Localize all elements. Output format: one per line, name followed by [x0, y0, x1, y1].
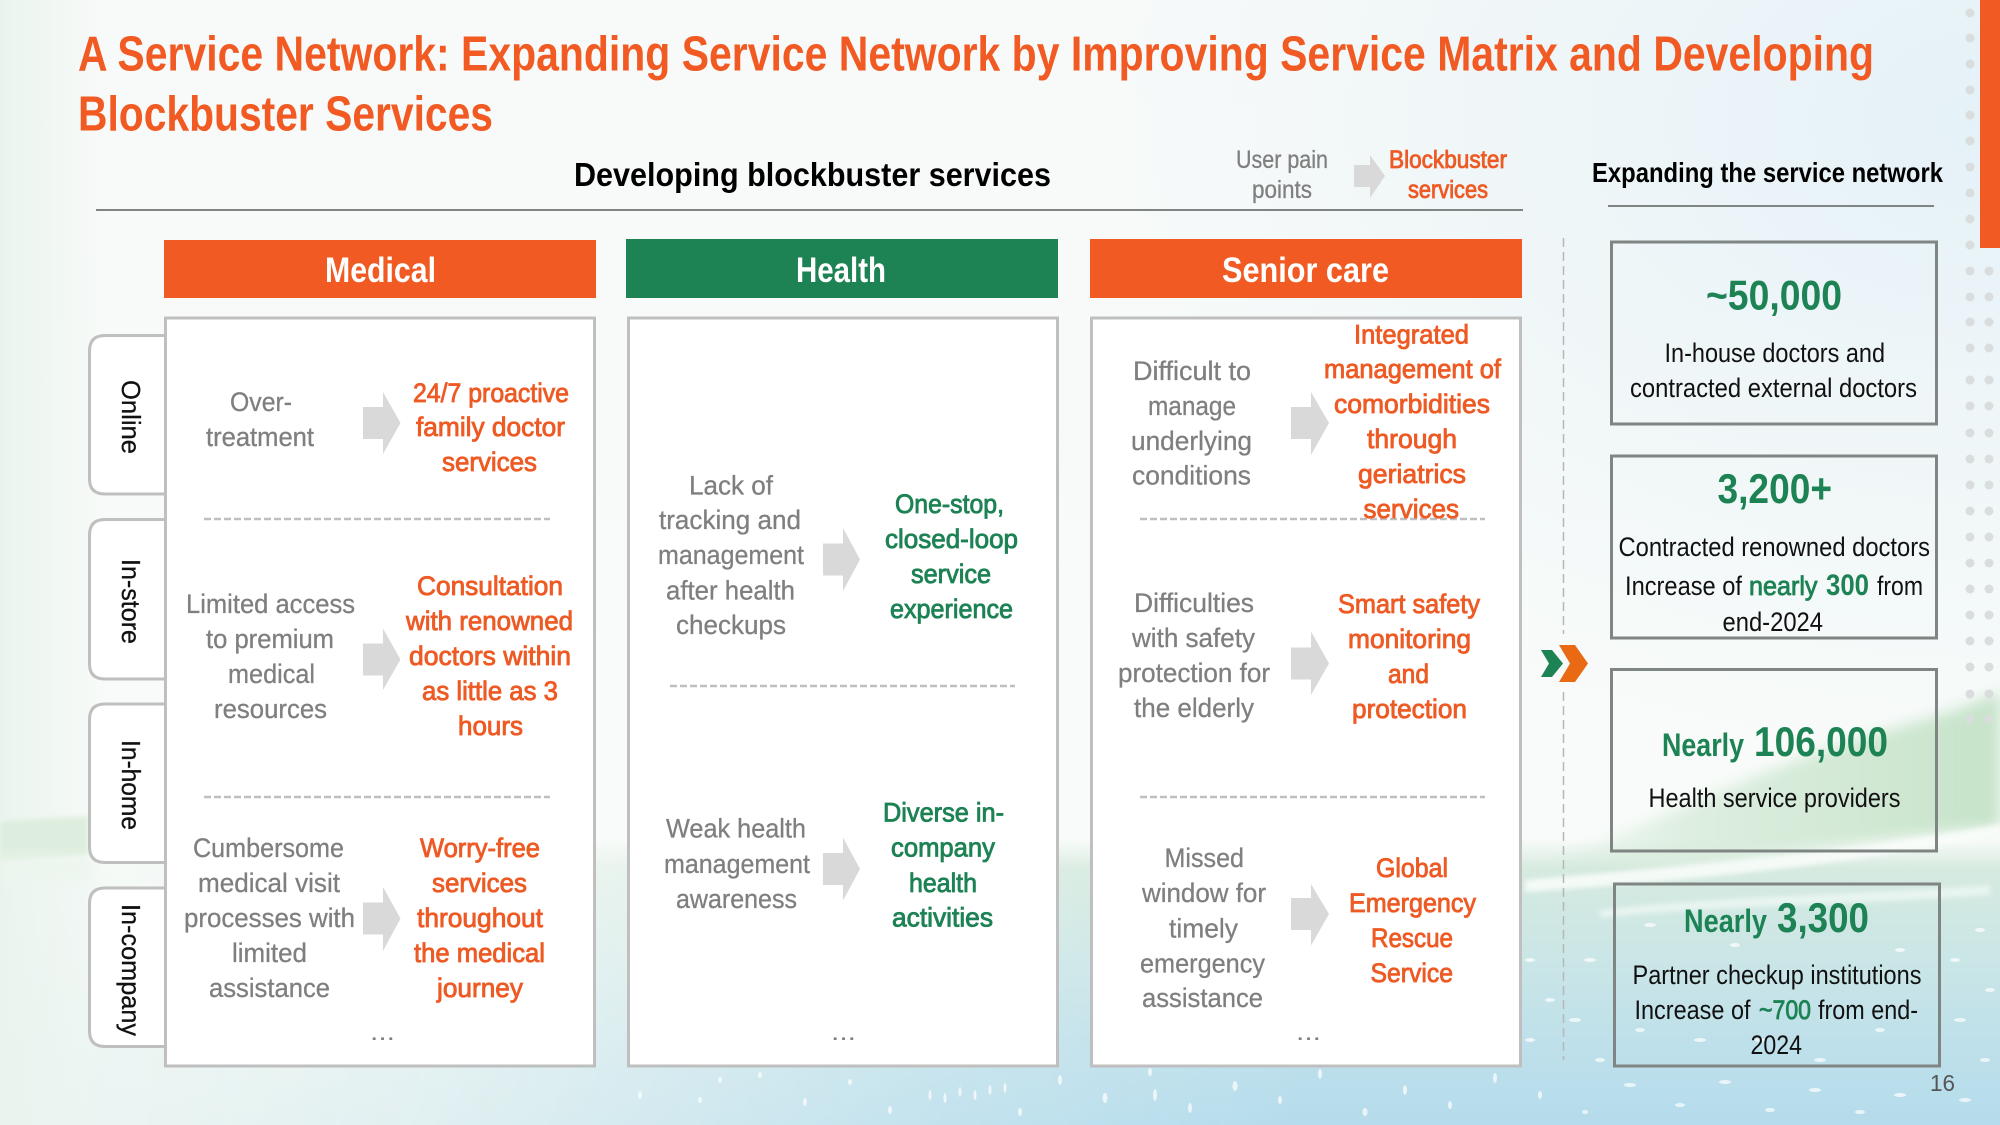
stat box: renowned doctors — [1612, 456, 1936, 638]
senior row 3: emergency assistance: assistance — [1142, 983, 1263, 1013]
channel tab: online — [90, 336, 165, 494]
panel: senior care — [1092, 318, 1520, 1066]
medical row 1: over-treatment: treatment — [206, 422, 314, 452]
legend: user pain points to blockbuster services: Blockbuster — [1389, 146, 1507, 174]
stat box: partner checkup institutions: Increase of — [1634, 995, 1751, 1025]
medical row 1: over-treatment: services — [442, 447, 537, 477]
legend: user pain points to blockbuster services: points — [1252, 176, 1312, 204]
senior row 2: safety protection — [1118, 588, 1480, 724]
medical row 3: cumbersome visits: journey — [436, 973, 523, 1003]
stat box: partner checkup institutions: from end- — [1818, 995, 1918, 1025]
health row 1: lack of tracking — [658, 470, 1018, 640]
senior row 1: underlying conditions: Integrated — [1354, 320, 1469, 350]
health row 2: weak awareness: health — [909, 868, 977, 898]
medical row 3: cumbersome visits: limited — [232, 938, 307, 968]
senior row 3: emergency assistance: timely — [1169, 914, 1238, 944]
stat box: renowned doctors: nearly — [1749, 571, 1818, 601]
heading: expanding the service network: Expanding the service network — [1592, 157, 1943, 188]
senior row 1: underlying conditions: conditions — [1132, 460, 1251, 490]
stat box: partner checkup institutions: 2024 — [1750, 1030, 1802, 1060]
senior row 2: safety protection: protection for — [1118, 658, 1270, 688]
ellipsis: ... — [831, 1019, 856, 1046]
senior row 1: underlying conditions — [1131, 320, 1501, 524]
health row 1: lack of tracking: closed-loop — [885, 524, 1018, 554]
medical row 3: cumbersome visits: Worry-free — [420, 833, 540, 863]
stat box: partner checkup institutions: 3,300 — [1777, 894, 1869, 941]
stat box: renowned doctors: end-2024 — [1722, 607, 1823, 637]
senior row 1: underlying conditions: services — [1364, 494, 1459, 524]
stat box: doctors — [1612, 242, 1936, 424]
page number: 16 — [1930, 1070, 1955, 1096]
senior row 1: underlying conditions: Difficult to — [1133, 356, 1251, 386]
decoration: dot columns — [1966, 8, 1994, 724]
vertical dashed separator — [1562, 238, 1564, 1060]
stat box: partner checkup institutions: ~700 — [1759, 995, 1811, 1025]
column header: medical: Medical — [325, 251, 436, 290]
medical row 3: cumbersome visits: the medical — [414, 938, 545, 968]
stat box: renowned doctors: Contracted renowned doctors — [1618, 532, 1930, 562]
health row 2: weak awareness: company — [891, 832, 995, 862]
medical row 1: over-treatment: family doctor — [416, 412, 565, 442]
channel tab: in-store — [90, 520, 165, 679]
medical row 2: limited access: medical — [228, 659, 315, 689]
medical row 2: limited access: resources — [214, 694, 327, 724]
heading: developing blockbuster services: Developing blockbuster services — [574, 156, 1051, 193]
senior row 1: underlying conditions: comorbidities — [1334, 389, 1490, 419]
stat box: renowned doctors: Increase of — [1625, 571, 1742, 601]
health row 1: lack of tracking: Lack of — [689, 470, 773, 500]
medical row 3: cumbersome visits: Cumbersome — [193, 833, 344, 863]
panel: medical — [166, 318, 594, 1066]
health row 1: lack of tracking: service — [911, 559, 991, 589]
health row 2: weak awareness: awareness — [676, 884, 797, 914]
stat box: doctors: ~50,000 — [1706, 272, 1842, 318]
decoration: orange corner bar — [1980, 0, 2000, 248]
stat box: partner checkup institutions: Partner checkup institutions — [1632, 960, 1922, 990]
column header: health — [626, 239, 1058, 298]
ellipsis: ... — [370, 1019, 395, 1046]
medical row 3: cumbersome visits: assistance — [209, 973, 330, 1003]
stat box: health service providers: Health service providers — [1648, 783, 1900, 813]
senior row 1: underlying conditions: underlying — [1131, 426, 1252, 456]
divider: left section rule — [96, 209, 1523, 211]
senior row 1: underlying conditions: management of — [1324, 354, 1501, 384]
stat box: partner checkup institutions: Nearly — [1684, 903, 1767, 939]
senior row 2: safety protection: Difficulties — [1134, 588, 1254, 618]
health row 1: lack of tracking: after health — [666, 576, 795, 606]
health row 1: lack of tracking: tracking and — [659, 505, 801, 535]
medical row 2: limited access — [186, 571, 573, 741]
medical row 1: over-treatment: 24/7 proactive — [413, 378, 569, 408]
channel tab: in-home — [90, 704, 165, 862]
legend: user pain points to blockbuster services — [1236, 146, 1507, 204]
health row 1: lack of tracking: experience — [890, 594, 1013, 624]
health row 1: lack of tracking: management — [658, 540, 804, 570]
senior row 1: underlying conditions: through — [1367, 424, 1457, 454]
health row 2: weak awareness: management — [664, 849, 810, 879]
channel tab: in-home: In-home — [116, 740, 146, 830]
health row 2: weak awareness: Weak health — [666, 814, 806, 844]
senior row 2: safety protection: protection — [1352, 694, 1467, 724]
stat box: renowned doctors: 3,200+ — [1718, 465, 1832, 512]
legend: user pain points to blockbuster services: services — [1408, 176, 1488, 204]
senior row 2: safety protection: with safety — [1131, 623, 1255, 653]
medical row 2: limited access: to premium — [206, 624, 334, 654]
legend: user pain points to blockbuster services: User pain — [1236, 146, 1328, 174]
stat box: doctors: In-house doctors and — [1664, 338, 1885, 368]
column header: senior care — [1090, 239, 1522, 298]
medical row 2: limited access: with renowned — [405, 606, 573, 636]
column header: health: Health — [796, 251, 886, 290]
senior row 3: emergency assistance — [1140, 843, 1476, 1013]
stat box: doctors: contracted external doctors — [1630, 373, 1917, 403]
senior row 2: safety protection: Smart safety — [1338, 589, 1480, 619]
health row 2: weak awareness — [664, 798, 1004, 932]
medical row 3: cumbersome visits — [184, 833, 545, 1003]
stat box: partner checkup institutions — [1614, 884, 1940, 1066]
channel tab: online: Online — [116, 380, 146, 454]
senior row 2: safety protection: and — [1388, 659, 1429, 689]
medical row 3: cumbersome visits: medical visit — [198, 868, 340, 898]
medical row 2: limited access: doctors within — [409, 641, 571, 671]
stat box: health service providers — [1612, 670, 1936, 851]
stat box: health service providers: 106,000 — [1754, 718, 1888, 765]
panel: health — [628, 318, 1058, 1066]
senior row 3: emergency assistance: Service — [1370, 958, 1453, 988]
stat box: renowned doctors: from — [1877, 571, 1923, 601]
medical row 3: cumbersome visits: services — [432, 868, 527, 898]
stat box: renowned doctors: 300 — [1826, 569, 1869, 602]
senior row 3: emergency assistance: window for — [1141, 878, 1266, 908]
medical row 3: cumbersome visits: processes with — [184, 903, 355, 933]
senior row 2: safety protection: the elderly — [1134, 693, 1254, 723]
title: Blockbuster Services — [78, 88, 493, 142]
health row 1: lack of tracking: One-stop, — [895, 489, 1004, 519]
senior row 3: emergency assistance: emergency — [1140, 948, 1265, 978]
medical row 1: over-treatment — [206, 378, 569, 477]
medical row 2: limited access: hours — [458, 711, 523, 741]
senior row 2: safety protection: monitoring — [1348, 624, 1471, 654]
column header: medical — [164, 240, 596, 298]
senior row 1: underlying conditions: manage — [1148, 391, 1236, 421]
senior row 3: emergency assistance: Global — [1376, 853, 1448, 883]
health row 2: weak awareness: activities — [892, 902, 993, 932]
senior row 1: underlying conditions: geriatrics — [1358, 459, 1466, 489]
senior row 3: emergency assistance: Emergency — [1349, 888, 1476, 918]
medical row 2: limited access: Consultation — [417, 571, 563, 601]
health row 2: weak awareness: Diverse in- — [883, 798, 1004, 828]
channel tab: in-company — [90, 888, 165, 1046]
title — [78, 28, 1874, 142]
channel tab: in-company: In-company — [116, 904, 146, 1036]
medical row 1: over-treatment: Over- — [230, 387, 292, 417]
medical row 2: limited access: Limited access — [186, 589, 355, 619]
column header: senior care: Senior care — [1222, 251, 1389, 290]
senior row 3: emergency assistance: Missed — [1164, 843, 1244, 873]
senior row 3: emergency assistance: Rescue — [1371, 923, 1453, 953]
channel tab: in-store: In-store — [116, 559, 146, 644]
divider: right section rule — [1608, 205, 1934, 207]
stat box: health service providers: Nearly — [1662, 727, 1744, 763]
medical row 3: cumbersome visits: throughout — [417, 903, 543, 933]
medical row 2: limited access: as little as 3 — [422, 676, 558, 706]
health row 1: lack of tracking: checkups — [676, 610, 786, 640]
ellipsis: ... — [1296, 1019, 1321, 1046]
icon: double chevron arrow — [1541, 645, 1588, 682]
